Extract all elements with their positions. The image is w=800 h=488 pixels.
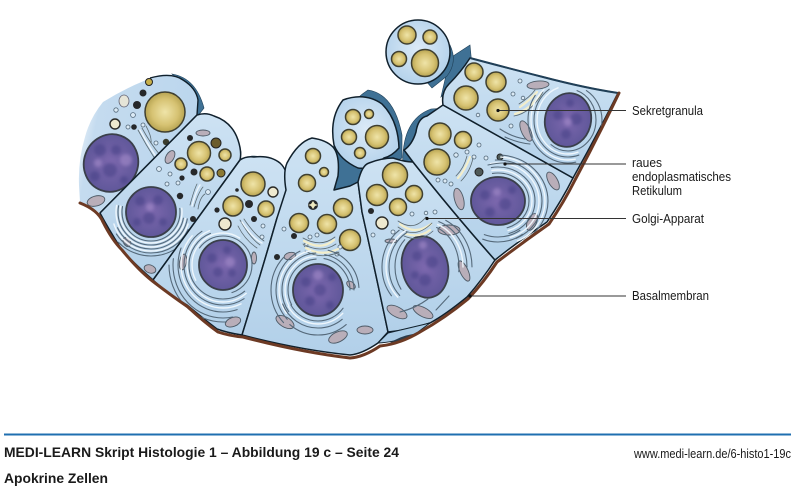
secretory granules (366, 162, 422, 216)
secretory granule (145, 92, 185, 132)
leader line: Sekretgranula (496, 109, 626, 112)
organelles (274, 200, 373, 346)
label: Sekretgranula: Sekretgranula (632, 104, 703, 118)
organelles (436, 143, 562, 232)
secreted vesicle: middle (333, 97, 399, 168)
cell: third from left (153, 157, 288, 335)
label: Basalmembran: Basalmembran (632, 289, 709, 303)
small flattened basal cell (378, 323, 430, 344)
rough endoplasmic reticulum (500, 77, 608, 163)
footer rule (4, 434, 791, 436)
illustration: apocrine gland cells (76, 20, 619, 358)
rough endoplasmic reticulum (106, 168, 196, 256)
leader line: Golgi-Apparat (425, 217, 626, 220)
label: raues endoplasmatisches Retikulum: Retikulum (632, 184, 682, 198)
cell: second from left (100, 114, 241, 280)
cell: left (76, 75, 198, 213)
cell: upper right (404, 105, 573, 260)
secretory granules (424, 123, 472, 175)
organelles (178, 187, 278, 329)
organelles (368, 208, 472, 322)
rough endoplasmic reticulum (378, 215, 472, 319)
secretory granules (223, 172, 274, 217)
nucleus (126, 187, 176, 237)
secreted vesicle: top (386, 20, 453, 88)
secretory granules (175, 142, 231, 181)
nucleus (396, 232, 454, 302)
cell: second from right (358, 158, 495, 332)
label: Golgi-Apparat: Golgi-Apparat (632, 212, 704, 226)
nucleus (199, 240, 247, 290)
nucleus (293, 264, 343, 316)
leader line: Basalmembran (468, 294, 626, 298)
basement membrane (80, 93, 619, 358)
organelles (121, 130, 225, 275)
label: raues endoplasmatisches Retikulum: endoplasmatisches (632, 170, 731, 184)
label: raues endoplasmatisches Retikulum: raues (632, 156, 662, 170)
footer heading: MEDI-LEARN Skript Histologie 1 – Abbildung 19 c – Seite 24 (4, 444, 399, 460)
rough endoplasmic reticulum (448, 155, 548, 247)
rough endoplasmic reticulum (271, 242, 365, 338)
secretory granules (454, 63, 509, 121)
nucleus (540, 89, 596, 151)
cell: centre (242, 138, 388, 355)
dark blue apical caps behind cells (172, 45, 472, 222)
secretory granules (290, 148, 360, 250)
leader line: raues endoplasmatisches Retikulum (503, 162, 626, 166)
rough endoplasmic reticulum (169, 208, 277, 322)
organelles (86, 78, 169, 208)
organelles (476, 79, 549, 143)
nucleus (471, 177, 525, 225)
footer subtitle: Apokrine Zellen (4, 470, 108, 486)
cell: right (443, 58, 618, 178)
nucleus (76, 127, 146, 199)
